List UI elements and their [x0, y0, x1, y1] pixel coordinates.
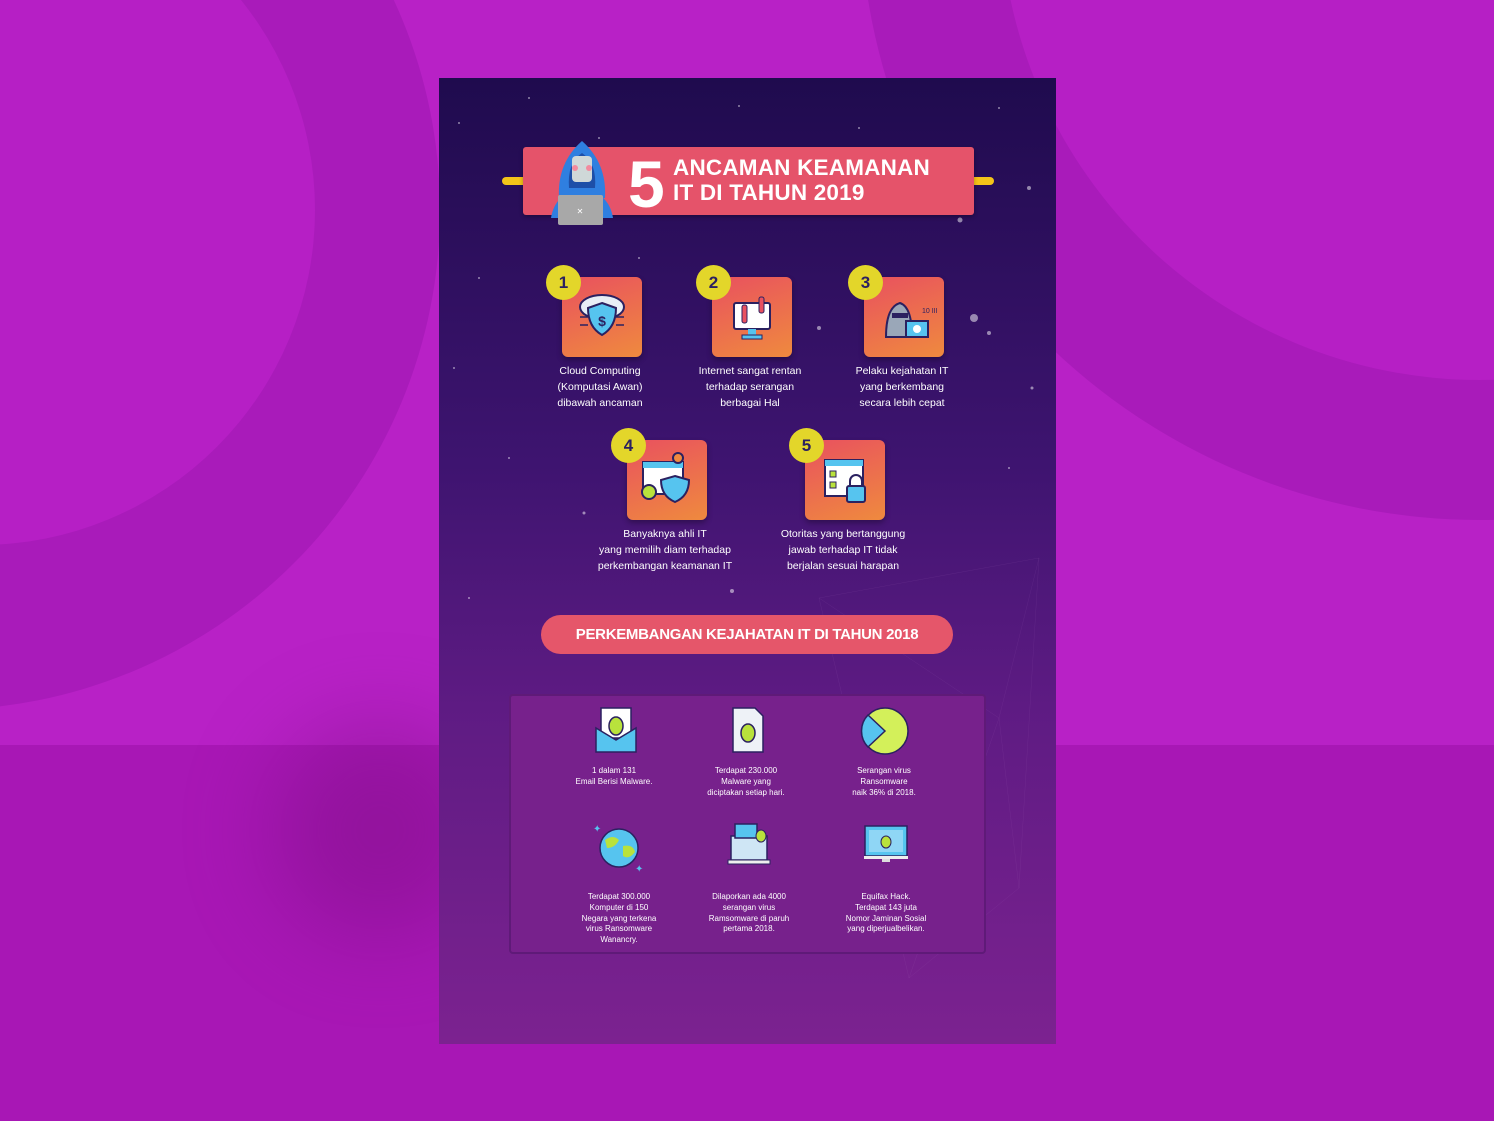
item 4: 4 — [624, 436, 633, 455]
item 2: berbagai Hal — [720, 397, 780, 409]
section heading — [541, 615, 953, 654]
item 2: 2 — [709, 273, 718, 292]
item 5: jawab terhadap IT tidak — [789, 544, 897, 556]
item 4: perkembangan keamanan IT — [598, 560, 732, 572]
stat 6: yang diperjualbelikan. — [847, 924, 925, 933]
stat 4: ✦ — [635, 864, 643, 875]
item 3 — [848, 265, 948, 409]
stat 6: Terdapat 143 juta — [855, 903, 917, 912]
stat 1: Email Berisi Malware. — [576, 777, 652, 786]
icon: hacker — [551, 141, 613, 225]
item 5: berjalan sesuai harapan — [787, 560, 899, 572]
item 1: 1 — [559, 273, 568, 292]
stat 5 — [709, 823, 789, 933]
item 3: secara lebih cepat — [859, 397, 945, 409]
stat 4: ✦ — [593, 824, 601, 835]
stat 6: Nomor Jaminan Sosial — [846, 914, 926, 923]
item 1: Cloud Computing — [559, 365, 641, 377]
stat 4 — [582, 824, 656, 944]
stat 5: pertama 2018. — [723, 924, 775, 933]
stat 5: Ramsomware di paruh — [709, 914, 789, 923]
item 3: 10 III — [922, 308, 938, 315]
stat 3: naik 36% di 2018. — [852, 788, 916, 797]
title banner: ANCAMAN KEAMANAN — [673, 155, 930, 180]
stat 4: Komputer di 150 — [590, 903, 648, 912]
stat 6: Equifax Hack. — [861, 892, 911, 901]
title banner — [502, 141, 994, 225]
item 2: terhadap serangan — [706, 381, 794, 393]
section heading: PERKEMBANGAN KEJAHATAN IT DI TAHUN 2018 — [576, 626, 918, 643]
stat 4: Terdapat 300.000 — [588, 892, 650, 901]
stat 5: serangan virus — [723, 903, 775, 912]
item 2 — [696, 265, 801, 409]
item 4: yang memilih diam terhadap — [599, 544, 731, 556]
item 3: Pelaku kejahatan IT — [856, 365, 948, 377]
title banner: 5 — [628, 147, 665, 221]
stat 2: diciptakan setiap hari. — [707, 788, 785, 797]
item 1: $ — [598, 313, 606, 329]
stat 3: Ransomware — [860, 777, 908, 786]
stat 1: 1 dalam 131 — [592, 766, 636, 775]
stat 6 — [846, 825, 926, 933]
item 5 — [781, 428, 905, 572]
stat 4: Negara yang terkena — [582, 914, 656, 923]
stat 2 — [707, 707, 785, 797]
item 3: yang berkembang — [860, 381, 944, 393]
stat 3 — [852, 707, 916, 797]
item 2: Internet sangat rentan — [699, 365, 801, 377]
item 1: (Komputasi Awan) — [557, 381, 642, 393]
stat 2: Malware yang — [721, 777, 771, 786]
stat 5: Dilaporkan ada 4000 — [712, 892, 786, 901]
item 1 — [546, 265, 644, 409]
panel: stats — [509, 694, 986, 954]
title banner: IT DI TAHUN 2019 — [673, 180, 865, 205]
poster — [439, 78, 1056, 1044]
item 4: Banyaknya ahli IT — [623, 528, 707, 540]
item 5: 5 — [802, 436, 811, 455]
stat 4: virus Ransomware — [586, 924, 652, 933]
icon: hacker: ✕ — [577, 207, 583, 216]
item 4 — [598, 428, 732, 572]
stat 4: Wanancry. — [600, 935, 638, 944]
item 3: 3 — [861, 273, 870, 292]
stat 3: Serangan virus — [857, 766, 911, 775]
stat 2: Terdapat 230.000 — [715, 766, 777, 775]
item 5: Otoritas yang bertanggung — [781, 528, 905, 540]
stat 1 — [576, 707, 652, 786]
item 1: dibawah ancaman — [557, 397, 643, 409]
